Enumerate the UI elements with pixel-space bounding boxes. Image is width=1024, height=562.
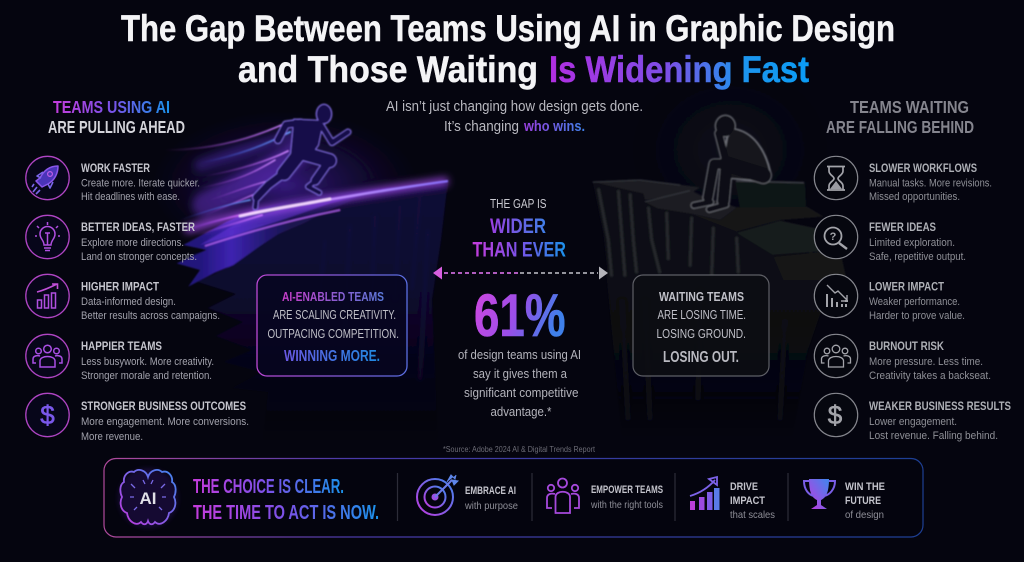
- arrow: gap between the two sides: [433, 266, 608, 280]
- rock body: [606, 250, 825, 440]
- benefit: higher impact: Better results across campaigns.: [81, 310, 220, 322]
- benefit: happier teams: Less busywork. More creativity.: [81, 356, 214, 368]
- stat description: of design teams using AI: [458, 347, 581, 362]
- ledge surfaces: [593, 179, 700, 200]
- subtitle: [386, 99, 643, 135]
- subtitle: It’s changing: [444, 119, 519, 135]
- risk: burnout: [814, 334, 991, 382]
- risk: slower workflows: Missed opportunities.: [869, 191, 960, 203]
- illustration: left cliff with runner: [150, 104, 448, 445]
- action: embrace AI: EMBRACE AI: [465, 485, 516, 497]
- benefit: higher impact: Data-informed design.: [81, 296, 176, 308]
- risk: burnout: Creativity takes a backseat.: [869, 370, 991, 382]
- left heading: TEAMS USING AI: [53, 97, 170, 117]
- action: drive impact: [690, 477, 775, 521]
- risk: fewer ideas: Safe, repetitive output.: [869, 251, 966, 263]
- action: drive impact: IMPACT: [730, 495, 765, 507]
- risk: slower workflows: [814, 156, 992, 203]
- benefit: stronger business outcomes: More revenue.: [81, 431, 143, 443]
- benefit: happier teams: HAPPIER TEAMS: [81, 339, 162, 353]
- callout: the gap is wider than ever: THAN EVER: [472, 238, 566, 262]
- risk: lower impact: Weaker performance.: [869, 296, 960, 308]
- panel: waiting teams: [633, 275, 769, 376]
- panel: AI-enabled teams: ARE SCALING CREATIVITY.: [273, 308, 396, 322]
- benefit: better ideas: BETTER IDEAS, FASTER: [81, 220, 195, 234]
- benefit: stronger business outcomes: STRONGER BUSINESS OUTCOMES: [81, 399, 246, 413]
- action: win the future: of design: [845, 509, 884, 521]
- action: empower teams: with the right tools: [590, 499, 663, 511]
- risk: burnout: More pressure. Less time.: [869, 356, 983, 368]
- callout: the gap is wider than ever: THE GAP IS: [490, 197, 546, 211]
- glowing ledge line: [185, 181, 448, 230]
- action: drive impact: DRIVE: [730, 481, 758, 493]
- cliff top surface: [177, 181, 448, 287]
- risk: burnout: BURNOUT RISK: [869, 339, 944, 353]
- stat: 61 percent: 61%: [474, 282, 566, 349]
- risk: weaker business results: Lost revenue. Falling behind.: [869, 430, 998, 442]
- right heading: TEAMS WAITING: [850, 97, 969, 117]
- action: win the future: [804, 479, 885, 521]
- panel: AI-enabled teams: WINNING MORE.: [284, 348, 380, 365]
- panel: risks of teams waiting: [814, 156, 1011, 442]
- icon: seated man silhouette: [694, 115, 771, 209]
- benefit: stronger business outcomes: [26, 393, 249, 443]
- illustration: right cliff with seated man: [593, 55, 847, 440]
- left heading: ARE PULLING AHEAD: [48, 117, 185, 137]
- panel: waiting teams: LOSING OUT.: [663, 349, 739, 366]
- benefit: happier teams: [26, 334, 214, 382]
- panel: AI-enabled teams: AI-ENABLED TEAMS: [282, 290, 384, 304]
- benefit: better ideas: [26, 215, 197, 263]
- callout: the gap is wider than ever: WIDER: [490, 215, 546, 238]
- subtitle: who wins.: [523, 119, 585, 135]
- action: drive impact: that scales: [730, 509, 775, 521]
- benefit: better ideas: Explore more directions.: [81, 237, 184, 249]
- icon: AI brain: AI: [140, 489, 156, 508]
- title: Is Widening Fast: [549, 49, 809, 90]
- panel: AI-enabled teams: OUTPACING COMPETITION.: [268, 327, 399, 341]
- subtitle: AI isn’t just changing how design gets done.: [386, 99, 643, 115]
- action: win the future: WIN THE: [845, 481, 885, 493]
- stat description: advantage.*: [490, 404, 552, 419]
- risk: lower impact: LOWER IMPACT: [869, 280, 945, 294]
- rock faces: [593, 182, 783, 280]
- risk: lower impact: Harder to prove value.: [869, 310, 965, 322]
- benefit: work faster: [26, 156, 200, 203]
- risk: slower workflows: SLOWER WORKFLOWS: [869, 161, 977, 175]
- action: embrace AI: with purpose: [464, 500, 518, 512]
- risk: lower impact: [814, 274, 965, 322]
- panel: benefits of teams using AI: [26, 156, 249, 443]
- risk: fewer ideas: Limited exploration.: [869, 237, 955, 249]
- action: win the future: FUTURE: [845, 495, 881, 507]
- title: and Those Waiting: [238, 49, 538, 90]
- panel: AI-enabled teams: [257, 275, 407, 376]
- action: empower teams: EMPOWER TEAMS: [591, 484, 663, 496]
- benefit: work faster: WORK FASTER: [81, 161, 150, 175]
- stat description: significant competitive: [464, 385, 578, 400]
- panel: waiting teams: ARE LOSING TIME.: [658, 308, 746, 322]
- stat description: say it gives them a: [473, 366, 568, 381]
- benefit: higher impact: HIGHER IMPACT: [81, 280, 160, 294]
- benefit: better ideas: Land on stronger concepts.: [81, 251, 197, 263]
- left heading: [48, 97, 185, 137]
- risk: slower workflows: Manual tasks. More revisions.: [869, 178, 992, 190]
- speed streaks: [165, 122, 300, 235]
- action: embrace AI: [417, 475, 518, 515]
- risk: weaker business results: $: [828, 400, 843, 430]
- call to action headline: THE CHOICE IS CLEAR.: [193, 475, 344, 498]
- call to action headline: THE TIME TO ACT IS NOW.: [193, 501, 379, 524]
- risk: weaker business results: Lower engagement.: [869, 416, 957, 428]
- icon: AI brain: [118, 468, 178, 528]
- title: [121, 8, 895, 90]
- risk: fewer ideas: ?: [830, 231, 837, 243]
- panel: waiting teams: LOSING GROUND.: [656, 327, 746, 341]
- benefit: stronger business outcomes: More engagement. More conversions.: [81, 416, 249, 428]
- risk: fewer ideas: FEWER IDEAS: [869, 220, 936, 234]
- benefit: stronger business outcomes: $: [40, 400, 55, 430]
- risk: weaker business results: [814, 393, 1011, 442]
- call to action headline: [193, 475, 379, 524]
- callout: the gap is wider than ever: [472, 197, 566, 262]
- stat description: [458, 347, 581, 419]
- benefit: work faster: Create more. Iterate quicker.: [81, 178, 200, 190]
- right heading: [826, 97, 974, 137]
- panel: call to action banner: [104, 458, 923, 537]
- risk: fewer ideas: [814, 215, 966, 263]
- right heading: ARE FALLING BEHIND: [826, 117, 974, 137]
- panel: waiting teams: WAITING TEAMS: [659, 290, 744, 304]
- icon: runner silhouette: [255, 104, 348, 207]
- benefit: happier teams: Stronger morale and retention.: [81, 370, 212, 382]
- cliff rock body: [188, 180, 448, 445]
- action: empower teams: [547, 478, 663, 513]
- benefit: higher impact: [26, 274, 220, 322]
- benefit: work faster: Hit deadlines with ease.: [81, 191, 180, 203]
- source note: *Source: Adobe 2024 AI & Digital Trends Report: [443, 445, 596, 454]
- stat: 61 percent: [458, 282, 581, 419]
- title: The Gap Between Teams Using AI in Graphic Design: [121, 8, 895, 49]
